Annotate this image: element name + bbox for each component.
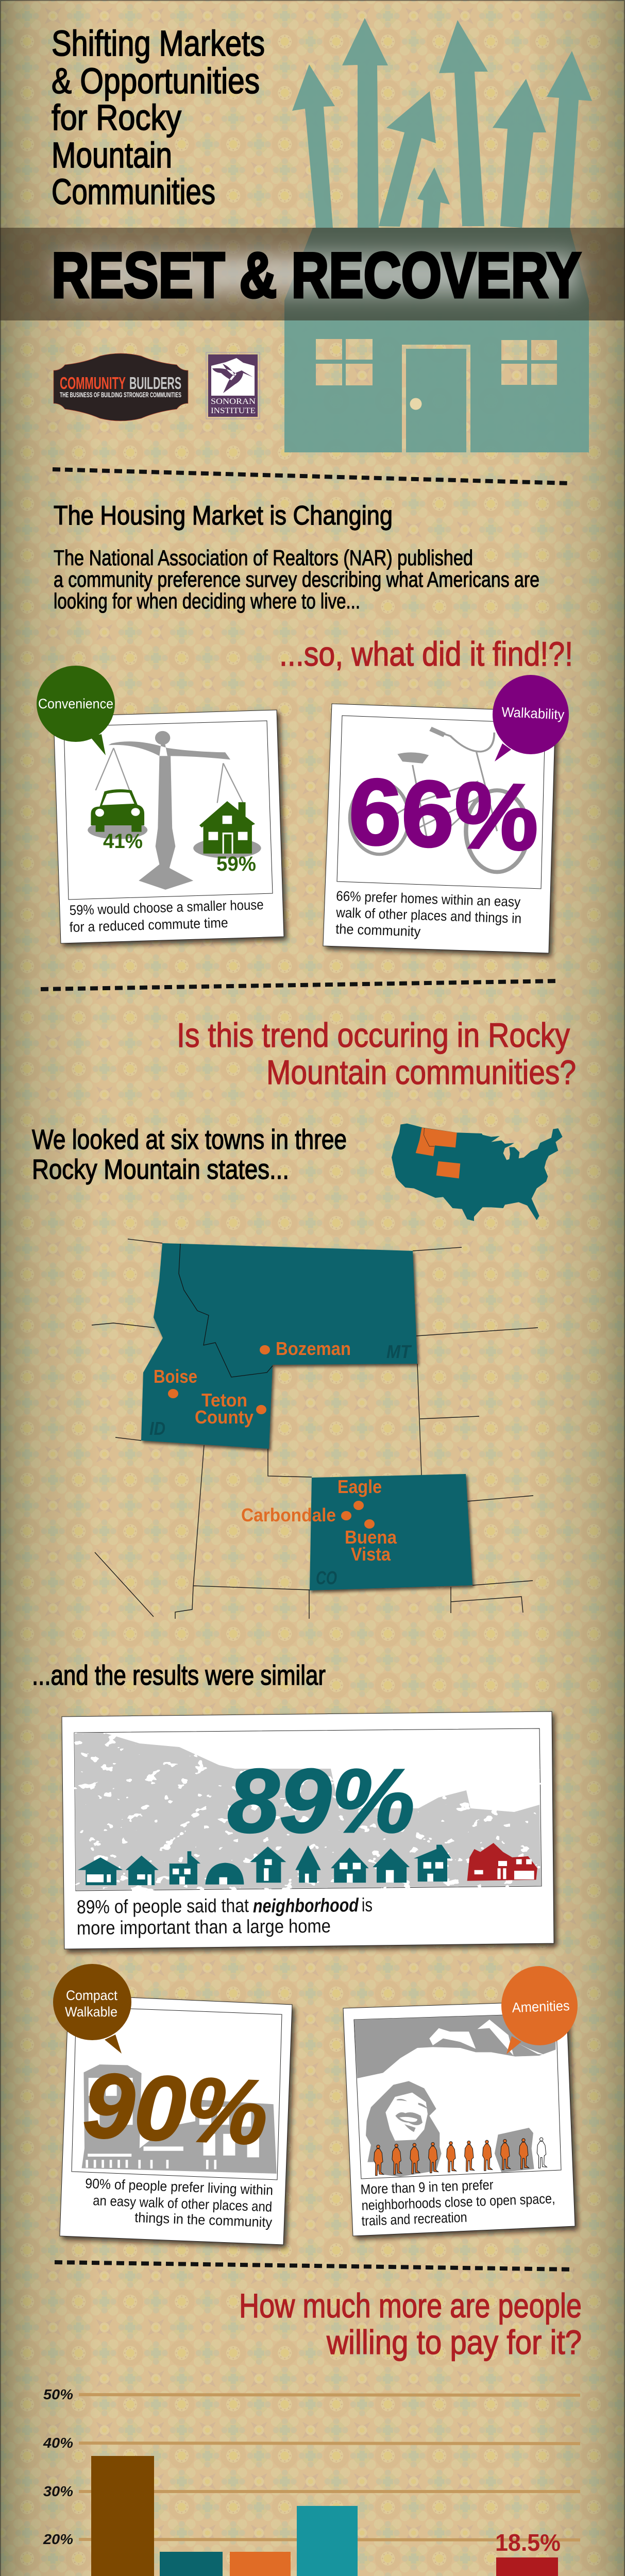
bubble: amenities: Amenities <box>512 1998 570 2015</box>
logo: Sonoran Institute <box>206 352 260 419</box>
intro paragraph: The National Association of Realtors (NAR) published <box>54 546 473 570</box>
panel: 90 percent compact walkable <box>60 1995 292 2245</box>
caption: More than 9 in ten prefer <box>360 2177 494 2197</box>
caption: the community <box>335 921 421 939</box>
intro paragraph <box>54 546 539 613</box>
y axis labels: 50% <box>43 2386 73 2402</box>
caption: 66% prefer homes within an easy <box>336 888 521 910</box>
caption <box>335 888 522 939</box>
state label MT: MT <box>386 1341 412 1362</box>
logo: Sonoran Institute: SONORAN <box>211 397 256 406</box>
town markers and labels: Buena <box>345 1527 397 1548</box>
bubble: convenience <box>37 666 115 755</box>
town markers and labels: Boise <box>154 1366 197 1387</box>
state label ID: ID <box>149 1418 165 1439</box>
value: 59%: 59% <box>216 853 256 875</box>
red heading: what did it find: ...so, what did it find!?! <box>279 635 573 673</box>
title block: subtitle: Shifting Markets <box>52 23 265 63</box>
value: 90%: 90% <box>81 2054 269 2164</box>
value: 66%: 66% <box>347 758 540 870</box>
house with arrows illustration <box>284 18 592 452</box>
caption: 90% of people prefer living within <box>85 2176 274 2198</box>
US map inset <box>392 1124 563 1221</box>
title block: subtitle: Mountain <box>52 135 172 175</box>
bubble: compact walkable: Walkable <box>65 2004 117 2020</box>
row of ten people <box>374 2138 547 2176</box>
red heading: willing to pay <box>239 2286 582 2361</box>
town markers and labels: Carbondale <box>241 1504 336 1526</box>
bubble: compact walkable <box>53 1964 131 2054</box>
y axis labels: 30% <box>43 2483 73 2499</box>
balance scale with car and house <box>88 731 261 890</box>
town markers and labels: County <box>195 1406 254 1428</box>
caption: is <box>362 1894 373 1916</box>
caption: things in the community <box>134 2210 273 2230</box>
title block: subtitle: for Rocky <box>52 97 181 138</box>
bar chart <box>43 2386 580 2576</box>
logo: Community Builders: BUILDERS <box>129 374 181 393</box>
caption: trails and recreation <box>361 2210 467 2229</box>
caption: walk of other places and things in <box>335 905 522 926</box>
bicycle illustration <box>350 729 528 872</box>
text: six towns: Rocky Mountain states... <box>32 1154 289 1185</box>
text: six towns <box>32 1124 347 1185</box>
town markers and labels: Bozeman <box>276 1338 351 1359</box>
town markers and labels <box>154 1338 397 1565</box>
grey neighbourhood photo texture <box>74 1733 542 1891</box>
bubble: walkability <box>493 675 569 761</box>
town markers and labels: Vista <box>351 1544 391 1565</box>
y axis labels: 20% <box>43 2531 73 2547</box>
town markers and labels: Eagle <box>337 1476 382 1497</box>
average value: 18.5% <box>495 2529 561 2556</box>
caption: an easy walk of other places and <box>93 2193 273 2215</box>
caption: more important than a large home <box>77 1916 331 1939</box>
logo: Community Builders <box>54 353 188 421</box>
bars <box>91 2456 558 2576</box>
red mansion <box>467 1843 537 1881</box>
header band <box>0 228 625 320</box>
title block: subtitle <box>52 23 265 212</box>
value: 41%: 41% <box>103 830 143 853</box>
logo: Community Builders: COMMUNITY <box>60 374 126 393</box>
title block: subtitle: Communities <box>52 172 215 212</box>
panel: convenience <box>54 710 284 943</box>
row of teal houses <box>78 1845 451 1885</box>
y axis labels <box>43 2386 73 2576</box>
intro paragraph: looking for when deciding where to live... <box>54 589 360 613</box>
town markers and labels: Teton <box>201 1389 247 1411</box>
caption: for a reduced commute time <box>69 915 228 935</box>
bubble: amenities <box>501 1966 578 2054</box>
logo: Sonoran Institute: INSTITUTE <box>211 406 256 415</box>
red heading: rocky mountain trend: Is this trend occuring in Rocky <box>177 1016 570 1054</box>
red heading: rocky mountain trend <box>177 1016 576 1091</box>
bubble: walkability: Walkability <box>501 704 565 722</box>
bubble: convenience: Convenience <box>38 696 113 711</box>
caption <box>85 2176 274 2230</box>
y axis labels: 40% <box>43 2435 73 2451</box>
value: 89%: 89% <box>227 1751 415 1852</box>
caption: 59% would choose a smaller house <box>69 897 264 918</box>
caption <box>69 897 264 935</box>
state label CO: CO <box>316 1567 337 1588</box>
map: Idaho and Montana <box>141 1243 417 1449</box>
panel: 89 percent neighborhood <box>62 1711 554 1949</box>
caption: neighborhood <box>253 1894 359 1917</box>
thin neighbouring state lines <box>92 1239 538 1619</box>
caption <box>77 1894 373 1939</box>
house door and window cutouts <box>87 1859 443 1885</box>
caption <box>360 2177 555 2229</box>
grey mountain and face illustration <box>354 2013 556 2177</box>
map: Colorado <box>310 1474 472 1590</box>
caption: neighborhoods close to open space, <box>361 2191 555 2213</box>
panel: walkability <box>323 704 555 953</box>
text: six towns: We looked at six towns in three <box>32 1124 347 1155</box>
caption: 89% of people said that <box>77 1895 249 1918</box>
red heading: willing to pay: willing to pay for it? <box>326 2323 582 2361</box>
title block: subtitle: & Opportunities <box>52 61 260 101</box>
text: results similar: ...and the results were similar <box>32 1660 326 1691</box>
heading: housing market: The Housing Market is Changing <box>54 501 393 531</box>
bubble: compact walkable: Compact <box>66 1988 117 2003</box>
grey main-street buildings <box>82 2064 277 2174</box>
logo: Community Builders: THE BUSINESS OF BUILDING STRONGER COMMUNITIES <box>60 391 181 399</box>
panel: amenities <box>343 2001 575 2236</box>
red heading: rocky mountain trend: Mountain communities? <box>266 1053 576 1091</box>
